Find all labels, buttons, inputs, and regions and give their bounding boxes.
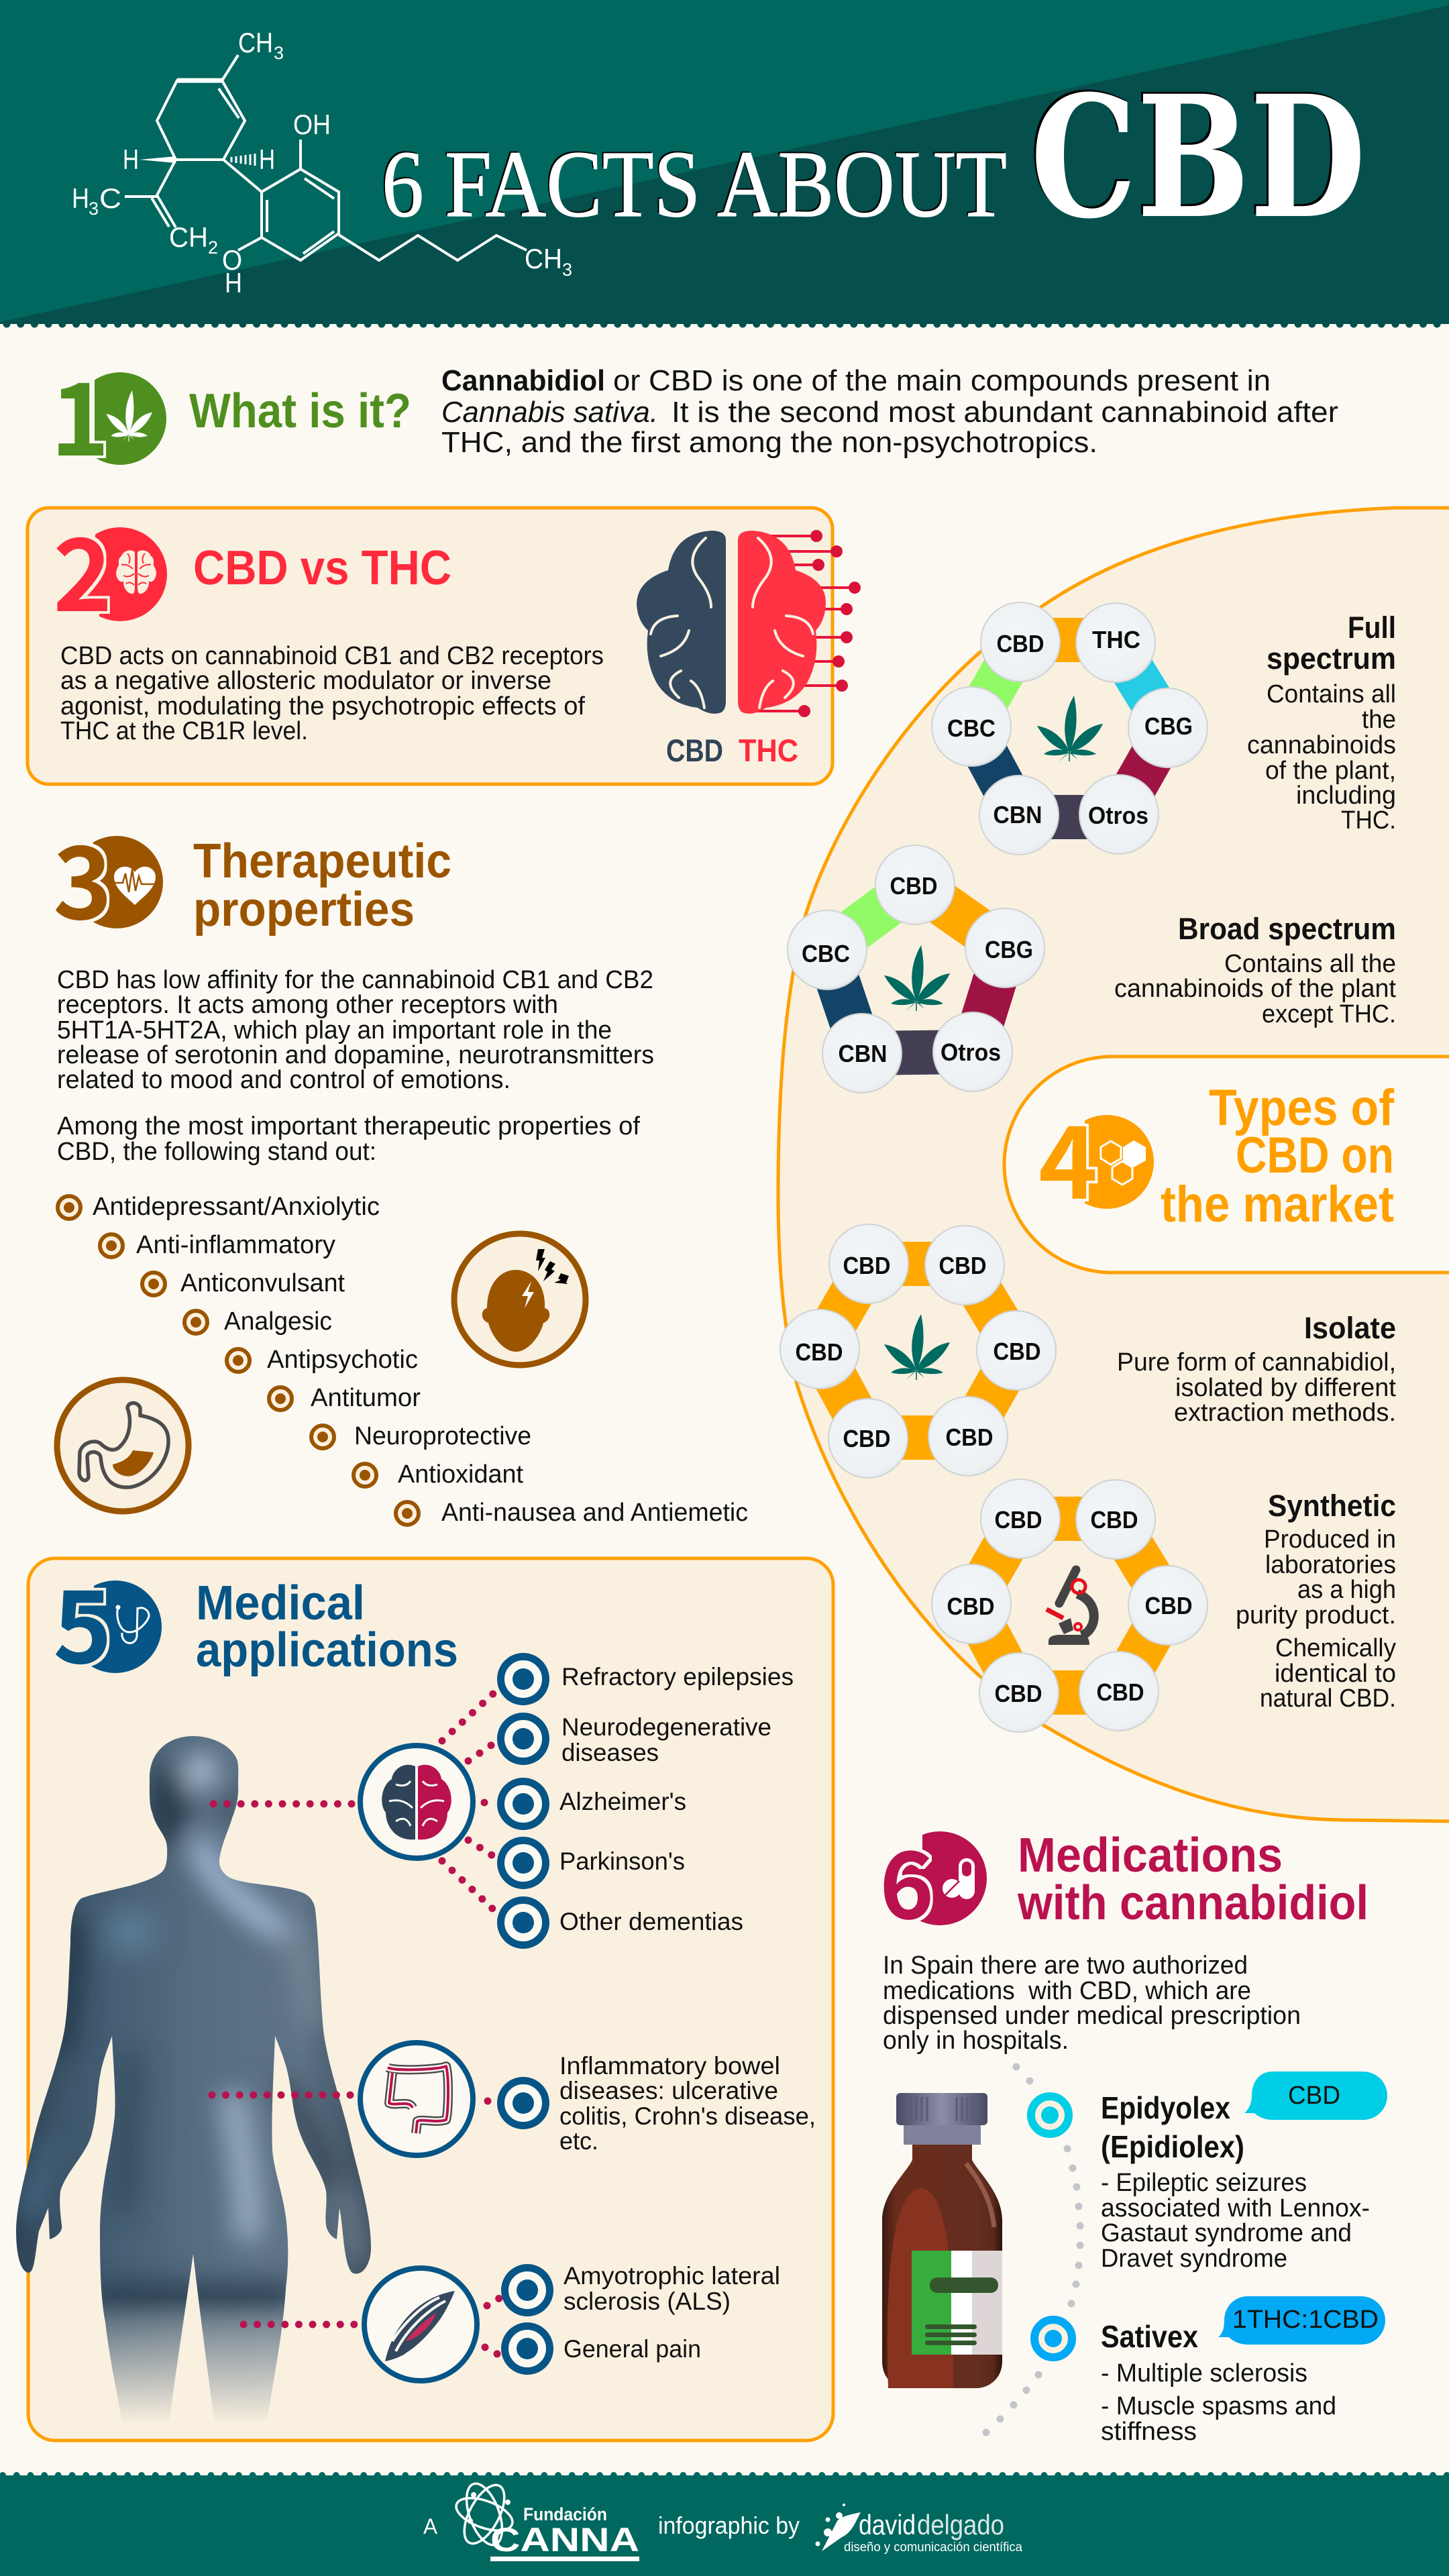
text block: receptors. It acts among other receptors with	[57, 991, 558, 1019]
list: therapeutic properties: Antioxidant	[398, 1460, 523, 1489]
text: isolate: isolated by different	[1175, 1374, 1396, 1402]
speech bubble: CBD: CBD	[1288, 2082, 1340, 2110]
icon: number 3 with heart: 3	[53, 803, 113, 949]
medication: Epidyolex: - Epileptic seizures	[1101, 2169, 1307, 2197]
text: broad spectrum: cannabinoids of the plant	[1114, 975, 1396, 1003]
text: full spectrum: including	[1296, 782, 1396, 810]
icon: muscle	[364, 2268, 477, 2381]
medication: Sativex: - Multiple sclerosis	[1101, 2359, 1307, 2387]
footer	[0, 2475, 1449, 2576]
heading: CBD on	[1236, 1127, 1394, 1184]
icon: number 6 with pills: 6	[879, 1811, 934, 1945]
speech bubble: 1THC:1CBD	[1218, 2296, 1385, 2345]
diagram: synthetic: CBD	[1096, 1678, 1144, 1706]
icon: number 4 with hexagons	[1026, 1083, 1154, 1228]
icon: CBD molecule: 2	[208, 237, 218, 258]
medication: Epidyolex: Epidyolex	[1101, 2090, 1230, 2125]
logo: David Delgado: david	[859, 2509, 916, 2540]
icon: CBD molecule: CH	[169, 221, 208, 253]
medication: Sativex: stiffness	[1101, 2418, 1197, 2446]
icon: number 2 with brain: 2	[53, 495, 113, 641]
text: broad spectrum: Broad spectrum	[1178, 912, 1396, 946]
medication: Epidyolex: (Epidiolex)	[1101, 2129, 1244, 2164]
logo: David Delgado	[816, 2504, 1022, 2555]
text: broad spectrum: except THC.	[1262, 1000, 1396, 1028]
text block: THC at the CB1R level.	[60, 717, 308, 745]
list: muscular conditions: sclerosis (ALS)	[564, 2288, 731, 2315]
timeline dots	[982, 2063, 1084, 2436]
heading: Medical	[196, 1576, 365, 1630]
icon: microscope	[1046, 1570, 1094, 1645]
text block: In Spain there are two authorized	[883, 1951, 1248, 1980]
text block: CBD, the following stand out:	[57, 1138, 376, 1166]
diagram: full spectrum: CBN	[993, 801, 1042, 828]
section 3: therapeutic properties	[40, 803, 748, 1527]
list: muscular conditions: General pain	[564, 2335, 701, 2363]
text: isolate: Pure form of cannabidiol,	[1117, 1348, 1396, 1377]
icon: CBD molecule: O	[222, 244, 242, 276]
logo: David Delgado: diseño y comunicación científica	[844, 2540, 1022, 2555]
diagram: isolate: CBD	[993, 1338, 1041, 1365]
text: synthetic: Produced in	[1264, 1525, 1396, 1554]
text block	[57, 966, 654, 1166]
header banner	[0, 0, 1449, 324]
heading: properties	[193, 883, 415, 936]
icon: medicine bottle	[882, 2093, 1002, 2388]
section 6: medications with cannabidiol	[865, 1811, 1387, 2446]
text block: It is the second most abundant cannabinoid after	[672, 396, 1338, 429]
text: synthetic: natural CBD.	[1260, 1684, 1396, 1713]
icon: number 6 with pills	[865, 1811, 987, 1945]
credit text: A	[423, 2514, 438, 2538]
text: synthetic: Chemically	[1275, 1634, 1396, 1662]
diagram: full spectrum	[932, 602, 1208, 855]
text: full spectrum	[1247, 610, 1396, 835]
icon: CBD molecule: CH	[238, 27, 273, 58]
diagram: full spectrum: CBD	[997, 630, 1044, 657]
text block: Cannabis sativa.	[441, 396, 658, 429]
icon: intestine	[360, 2043, 473, 2155]
diagram: synthetic	[932, 1479, 1208, 1732]
logo: Fundación CANNA: CANNA	[490, 2521, 639, 2559]
text block: related to mood and control of emotions.	[57, 1066, 511, 1094]
diagram: synthetic: CBD	[947, 1593, 994, 1620]
icon: split brain CBD THC	[637, 530, 861, 717]
text: broad spectrum	[1114, 912, 1396, 1028]
list: bowel conditions: colitis, Crohn's disease,	[559, 2102, 816, 2130]
label: CBD and THC: THC	[739, 733, 798, 768]
medication: Sativex: Sativex	[1101, 2319, 1198, 2354]
icon: CBD molecule: H	[259, 144, 275, 175]
text: synthetic: purity product.	[1236, 1601, 1396, 1629]
list: brain conditions: Parkinson's	[559, 1847, 685, 1875]
text: full spectrum: spectrum	[1267, 641, 1396, 676]
diagram: isolate: CBD	[843, 1425, 891, 1452]
diagram: full spectrum: CBC	[947, 714, 996, 742]
diagram: isolate: CBD	[939, 1252, 986, 1279]
list: therapeutic properties	[58, 1193, 748, 1527]
icon: number 1 with leaf: 1	[50, 339, 110, 485]
heading: the market	[1161, 1176, 1394, 1233]
text block: 5HT1A-5HT2A, which play an important role in the	[57, 1016, 612, 1044]
diagram: full spectrum: THC	[1092, 626, 1140, 653]
diagram: synthetic: CBD	[1144, 1592, 1193, 1619]
logo: Fundación CANNA: Fundación	[523, 2504, 607, 2524]
diagram: isolate: CBD	[796, 1338, 843, 1366]
heading	[196, 1576, 458, 1677]
heading: Medications	[1018, 1829, 1283, 1882]
medication: Sativex	[1034, 2296, 1385, 2446]
text: broad spectrum: Contains all the	[1224, 950, 1396, 978]
icon: number 3 with heart	[40, 803, 163, 949]
icon: CBD molecule: 3	[562, 260, 572, 280]
list: muscular conditions	[504, 2262, 780, 2371]
icon: number 1 with leaf	[40, 339, 166, 485]
panel: CBD vs THC	[28, 495, 861, 784]
title: 6 FACTS ABOUT	[382, 131, 1007, 237]
heading: CBD vs THC	[193, 541, 451, 595]
title: CBD	[1030, 58, 1366, 256]
list: bowel conditions: Inflammatory bowel	[559, 2052, 780, 2080]
list: brain conditions: Neurodegenerative	[561, 1713, 771, 1741]
icon: CBD molecule	[72, 27, 572, 299]
list: therapeutic properties: Analgesic	[224, 1307, 332, 1336]
list: bowel conditions	[500, 2052, 816, 2155]
heading	[1017, 1829, 1368, 1930]
heading	[193, 835, 451, 936]
list: bowel conditions: etc.	[559, 2127, 598, 2155]
label: CBD and THC	[666, 733, 798, 768]
text block: THC, and the first among the non-psychotropics.	[441, 426, 1097, 459]
panel: types of CBD on the market	[778, 508, 1449, 1821]
list: therapeutic properties: Neuroprotective	[354, 1422, 531, 1450]
text block: medications with CBD, which are	[883, 1977, 1251, 2005]
list: therapeutic properties: Anti-nausea and Antiemetic	[441, 1499, 748, 1527]
diagram: full spectrum: Otros	[1088, 802, 1148, 829]
list: therapeutic properties: Antidepressant/Anxiolytic	[93, 1193, 380, 1221]
list: brain conditions: Other dementias	[559, 1908, 743, 1935]
text: full spectrum: THC.	[1341, 806, 1396, 835]
text: full spectrum: of the plant,	[1265, 757, 1396, 785]
title	[382, 58, 1366, 256]
text block: dispensed under medical prescription	[883, 2002, 1301, 2030]
text block: Among the most important therapeutic properties of	[57, 1112, 640, 1140]
diagram: isolate: CBD	[946, 1424, 993, 1451]
medication: Epidyolex: Dravet syndrome	[1101, 2245, 1287, 2273]
text block: only in hospitals.	[883, 2027, 1069, 2055]
text: isolate: extraction methods.	[1174, 1399, 1396, 1427]
text: full spectrum: Contains all	[1267, 680, 1396, 708]
list: brain conditions: Alzheimer's	[559, 1788, 686, 1815]
icon: CBD molecule: 3	[89, 199, 99, 219]
icon: CBD molecule: C	[99, 182, 121, 214]
icon: CBD molecule: OH	[293, 109, 331, 140]
icon: brain	[360, 1746, 473, 1858]
text block	[441, 364, 1338, 459]
icon: head with lightning	[454, 1234, 586, 1365]
diagram: broad spectrum: CBN	[839, 1040, 887, 1067]
text: synthetic: laboratories	[1265, 1551, 1396, 1579]
medication: Epidyolex: Gastaut syndrome and	[1101, 2219, 1352, 2247]
text: isolate: Isolate	[1304, 1311, 1396, 1345]
medication: Epidyolex	[1031, 2072, 1387, 2273]
heading: with cannabidiol	[1017, 1876, 1368, 1930]
icon: number 4 with hexagons: 4	[1038, 1083, 1098, 1228]
diagram: broad spectrum	[788, 845, 1044, 1093]
heading: applications	[196, 1623, 458, 1677]
diagram: broad spectrum: CBC	[802, 940, 850, 967]
icon: number 5 with stethoscope: 5	[53, 1547, 113, 1693]
human body silhouette	[0, 1731, 402, 2442]
text block: Cannabidiol	[441, 364, 605, 397]
panel: medical applications	[0, 1547, 833, 2442]
list: therapeutic properties: Anti-inflammatory	[136, 1231, 335, 1259]
list: brain conditions: Refractory epilepsies	[561, 1663, 794, 1690]
connectors: body to organs	[212, 1693, 500, 2355]
diagram: isolate: CBD	[843, 1252, 891, 1279]
diagram: broad spectrum: CBD	[890, 872, 938, 900]
diagram: broad spectrum: Otros	[941, 1038, 1001, 1066]
heading: Therapeutic	[193, 835, 451, 888]
section 1: what is it	[40, 339, 1338, 485]
text: synthetic: identical to	[1275, 1660, 1396, 1688]
diagram: synthetic: CBD	[1091, 1506, 1138, 1534]
text block	[883, 1951, 1301, 2055]
text: synthetic: Synthetic	[1268, 1489, 1396, 1523]
callout: section 4 heading	[1004, 1057, 1449, 1273]
logo: Fundación CANNA	[452, 2479, 639, 2561]
list: muscular conditions: Amyotrophic lateral	[564, 2262, 780, 2290]
medication: Sativex: - Muscle spasms and	[1101, 2392, 1336, 2420]
icon: CBD molecule: H	[225, 267, 242, 299]
icon: CBD molecule: H	[72, 182, 89, 214]
text: full spectrum: Full	[1348, 610, 1396, 645]
icon: number 5 with stethoscope	[40, 1547, 162, 1693]
text block: as a negative allosteric modulator or inverse	[60, 667, 551, 695]
text: full spectrum: the	[1362, 706, 1396, 734]
list: brain conditions: diseases	[561, 1739, 659, 1766]
text block: or CBD is one of the main compounds present in	[613, 364, 1271, 397]
diagram: full spectrum: CBG	[1144, 712, 1193, 740]
icon: CBD molecule: 3	[274, 43, 284, 63]
diagram: synthetic: CBD	[994, 1506, 1042, 1534]
text: full spectrum: cannabinoids	[1247, 731, 1396, 759]
speech bubble: CBD	[1244, 2072, 1387, 2120]
heading	[1161, 1079, 1395, 1233]
text block: CBD acts on cannabinoid CB1 and CB2 receptors	[60, 642, 604, 670]
text block: CBD has low affinity for the cannabinoid CB1 and CB2	[57, 966, 653, 994]
text: synthetic	[1236, 1489, 1396, 1713]
list: therapeutic properties: Antitumor	[311, 1384, 421, 1412]
heading: What is it?	[189, 384, 411, 438]
logo: David Delgado: delgado	[917, 2509, 1004, 2540]
icon: CBD molecule: H	[123, 144, 139, 175]
heading: Types of	[1209, 1079, 1395, 1136]
icon: CBD molecule: CH	[525, 243, 562, 274]
text block: agonist, modulating the psychotropic effects of	[60, 692, 585, 720]
list: bowel conditions: diseases: ulcerative	[559, 2077, 778, 2104]
credit text: infographic by	[658, 2512, 800, 2539]
icon: number 2 with brain	[40, 495, 167, 641]
icon: stomach	[57, 1380, 189, 1511]
list: brain conditions	[500, 1657, 794, 1945]
list: therapeutic properties: Anticonvulsant	[180, 1269, 345, 1297]
label: CBD and THC: CBD	[666, 733, 723, 768]
text block: release of serotonin and dopamine, neurotransmitters	[57, 1041, 654, 1069]
list: therapeutic properties: Antipsychotic	[267, 1346, 418, 1374]
speech bubble: 1THC:1CBD: 1THC:1CBD	[1232, 2306, 1379, 2334]
diagram: isolate	[780, 1224, 1056, 1478]
text: synthetic: as a high	[1297, 1576, 1396, 1604]
text block	[60, 642, 604, 745]
text: isolate	[1117, 1311, 1396, 1427]
medication: Epidyolex: associated with Lennox-	[1101, 2194, 1370, 2222]
diagram: synthetic: CBD	[994, 1680, 1042, 1707]
diagram: broad spectrum: CBG	[985, 936, 1033, 963]
